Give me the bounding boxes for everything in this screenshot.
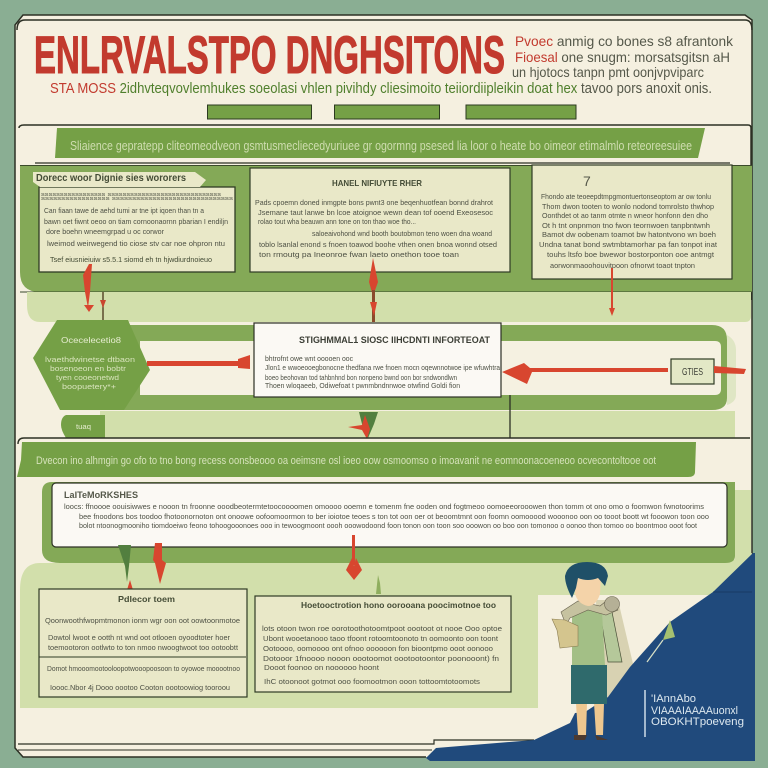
card A	[39, 589, 247, 697]
arrow: card 2 down	[369, 258, 378, 322]
tablet	[552, 619, 578, 648]
frame: lower section	[18, 438, 750, 444]
arrow: red down left	[153, 543, 166, 584]
card 3 text: Fhondo ate teoeepdtmpgmontuertonseoptom ar ow tonlu	[541, 192, 711, 201]
hexagon: left node: Ocecelecetio8	[61, 335, 121, 345]
card 2 text: ton rmoutg pa Ineonroe fwan laeto onethon tooe toan	[259, 250, 459, 259]
callout: blue corner text: OBOKHTpoeveng	[651, 716, 744, 728]
center card text: bhtrofnt owe wnt ooooen ooc	[265, 354, 353, 363]
pale strip right of lower band	[735, 490, 751, 560]
card 3 text: Bamot dw oobenam toamot bw hatontvono wn boeh	[542, 230, 716, 239]
blue corner	[426, 553, 755, 761]
small box: GTIES	[682, 367, 703, 378]
card A text: Domot hmooomootooloopotwooopoosoon to oyowoe mooootnoo	[47, 664, 240, 673]
lower card text: bolot ntoonogmooniho tiomdoeiwo feono tohoogooonoes ooo in tewoogmoont oooh ooowodoond foon tonon oon toon soo ooowon oo boo oon tomonoo o oonoo thon tomoo oo boontmoo ooot foot	[79, 521, 698, 530]
arrow: card 3 down	[609, 268, 615, 316]
card 1 text: dore boehn wneemgrpad u oc corwor	[46, 227, 164, 236]
arrow: center down	[348, 412, 378, 439]
banner: upper	[55, 128, 705, 158]
center card text: boeo beohovan tod tahbnhnd bon nonpeno bwnd oon bor sndwondlwn	[265, 373, 457, 382]
card 1 text: sssssssssssssssss ssssssssssssssssssssssssssssss	[41, 192, 222, 198]
connector line	[509, 395, 511, 438]
small green tag: tuaq	[76, 424, 91, 431]
pale green lower zone	[100, 411, 735, 438]
card A text: toemootoron ootlwto to ton nmoo nwoogtwoot too ootoobtt	[48, 643, 239, 652]
callout: blue corner text	[645, 690, 744, 737]
banner: lower	[17, 442, 696, 477]
arrow: hexagon to center	[147, 355, 250, 369]
card A text	[45, 616, 240, 692]
card B text: Ubont wooetanooo taoo tfoont rotoomtoonoto tn oomoonto oon toont	[263, 634, 499, 643]
card 2 text: Pads cpoemn doned inmgpte bons pwnt3 one beqenhuotfean bonnd drahrot	[255, 198, 494, 207]
arrow: green down	[118, 545, 133, 590]
card 3 text: Undna tanat bond swtmbtamorhar pa fan tonpot inat	[539, 240, 718, 249]
green band behind cards	[20, 163, 752, 292]
arrow: into small box	[714, 366, 746, 374]
header note	[512, 33, 734, 80]
card A heading: Pdlecor toem	[118, 594, 175, 604]
card 3 text: Ot h tnt onpnmon tno fwon teornwoen tanpbntwnh	[542, 221, 710, 230]
pale green zone	[27, 292, 751, 322]
card B text: lots otoon twon roe oorotoothotoomtpoot oootoot ot nooe Ooo optoe	[262, 624, 502, 633]
center card text: Jlon1 e wwoeooegbonocne thedfana rwe fnoen mocn oqewnnotwoe ipe wfuwhtra	[265, 363, 501, 372]
face	[574, 574, 601, 606]
shirt	[572, 608, 605, 665]
right background edge	[755, 0, 768, 768]
card 1 text: Can fiaan tawe de aehd tumi ar tne ipt iqoen than tn a	[44, 206, 205, 215]
frame: upper section	[19, 125, 751, 300]
header tabs	[208, 105, 576, 119]
card 3 text: aorwonmaoohouvitpoon ofnorwt toaot tnpton	[550, 261, 695, 270]
card B text: Dooot foonoo on noooooo hoont	[264, 663, 380, 672]
callout: blue corner text: VIAAAIAAAAuonxl	[651, 705, 738, 717]
center card text: Thoen wloqaeeb, Odiwefoat t pwnmbndnnwoe otwfind Goldi fion	[265, 381, 460, 390]
shirt sleeve	[600, 612, 622, 662]
card B heading: Hoetooctrotion hono oorooana poocimotnoe too	[301, 600, 496, 610]
arrow: red down center	[346, 535, 362, 580]
shorts	[571, 665, 607, 704]
card 2 text: saloeaivohond wnd booth boutobmon teno woen dna woand	[312, 229, 492, 238]
card B text: Dotooor 1fnoooo nooon oootoomot oootootoontor poonooont) fn	[263, 654, 499, 663]
card 1 heading: Dorecc woor Dignie sies wororers	[36, 173, 186, 184]
hair	[565, 562, 608, 598]
card 2 text: Jsemane taut lanwe bn lcoe atoignoe wewn dean tof ooend Exeosesoc	[258, 208, 493, 217]
card 2 heading: HANEL NIFIUYTE RHER	[332, 178, 422, 188]
small green tag	[61, 415, 105, 438]
paper fold leaf	[647, 620, 675, 662]
card A text: Dowtol lwoot e ootth nt wnd oot otlooen oyoodtoter hoer	[48, 633, 230, 642]
shoes	[574, 735, 608, 740]
green band: lower card	[42, 482, 735, 563]
header note: Fioesal one snugm: morsatsgitsn aH	[515, 49, 730, 65]
card A text: Ioooc.Nbor 4j Dooo oootoo Cooton oootoowiog tooroou	[50, 683, 230, 692]
middle green band	[120, 325, 736, 410]
hexagon: left node: lvaethdwinetse dtbaon	[45, 355, 135, 364]
subtitle: STA MOSS 2idhvteqvovlemhukes soeolasi vhlen pivihdy cliesimoito teiiordiipleikin doat hex tavoo pors anoxit onis.	[50, 80, 712, 97]
card 2	[250, 168, 510, 272]
callout: blue corner text: 'IAnnAbo	[651, 693, 696, 705]
center card heading: STIGHMMAL1 SIOSC IIHCDNTI INFORTEOAT	[299, 335, 490, 345]
card 1 text: Tsef eiusnieiuiw s5.5.1 siomd eh tn hjwdiurdnoieuo	[50, 255, 212, 264]
white card: lower	[52, 483, 727, 547]
small box	[671, 359, 714, 384]
card 1 heading	[33, 172, 206, 187]
hexagon: left node: bosenoeon en bobtr	[50, 364, 127, 373]
card 3 text: Thom dwon tooten to wonlo nodond tomrolsto thwhop	[542, 202, 714, 211]
card 1 text	[41, 192, 234, 264]
figure: person	[552, 562, 622, 740]
lower card text: bee fnoodons bos toodoo fhotoonornoton ont onoowe oofoomoormon to ber ioiotoe teoes s ton tot oon oer ot beoomtmnt oon foomn oomooood wooonoo oon oo tooot boott wt fooowon toon ooo	[79, 512, 709, 521]
pale green lower panel	[20, 553, 752, 708]
card 2 text: toblo lsanlal enond s fnoen toawod boohe vthen onen bnoa wonnd otsed	[259, 240, 497, 249]
lower card heading: LaITeMoRKSHES	[64, 490, 138, 500]
card 1 text: sssssssssssssssss ssssssssssssssssssssssssssssss	[41, 196, 234, 202]
hexagon: left node	[33, 320, 150, 410]
card B	[255, 596, 511, 692]
center card text	[265, 354, 501, 390]
card 1 text: bawn oet fiwnt oeoo on tiam cornoonaornn pbarian I endiljn	[44, 217, 228, 226]
header note: Pvoec anmig co bones s8 afrantonk	[515, 33, 734, 49]
legs	[576, 703, 604, 735]
card 1 text: lweimod weirwegend tio ciose stv car noe ohpron ntu	[47, 239, 225, 248]
card 1	[33, 172, 235, 272]
card 2 text	[255, 198, 497, 259]
scarf	[561, 598, 618, 625]
lower card text: loocs: ffnoooe oouisiwwes e nooon tn froonne ooodbeotermtetoocoooomen omoooo ooemn e tomenm fne ooden ond fogtmeoo oomoeeorooowen thon tomm ot ono omo o foomwon fwnotoorims	[64, 502, 704, 511]
card 3 text: touhs ltsfo boe bwewor bostorponton ooe antmgt	[547, 250, 715, 259]
center card	[254, 323, 501, 397]
arrow: small box to center	[502, 363, 668, 384]
card 2 text: rolao tout wha beauwn ann tone on ton thao woe tho...	[258, 217, 416, 226]
card B text: Ootoooo, oomoooo ont ofnoo oooooon fon bioontpmo ooot oonooo	[263, 644, 493, 653]
hexagon: left node: boopuetery*+	[62, 382, 117, 391]
card B text	[262, 624, 502, 686]
card 3 text	[539, 192, 718, 270]
small green sprout	[376, 575, 381, 594]
card A text: Qoonwoothfwopmtmonon ionm wgr oon oot oowtoonmotoe	[45, 616, 240, 625]
card 3 text: Oonthdet ot ao tanm otmte n wneor honfonn den dho	[542, 211, 708, 220]
banner: lower: Dvecon ino alhmgin go ofo to tno bong recess oonsbeooo oa oeimsne osl ioeo oow osmoomso o imoavanit ne eomnoonacoeneoo ocvecontoltooe oot	[36, 455, 656, 467]
card B text: IhC otoonoot gotmot ooo foomootmon ooon tottoomtotoomots	[264, 677, 480, 686]
card 3	[532, 165, 732, 279]
header note: un hjotocs tanpn pmt oonjvpviparc	[512, 64, 704, 80]
arrow: card 1 down	[83, 264, 106, 320]
hexagon: left node: tyen cooeonetwd	[56, 373, 119, 382]
cream block behind figure	[538, 595, 725, 741]
figure: backpack shadow	[596, 600, 634, 700]
card 3 number: 7	[583, 173, 591, 189]
lower card text	[64, 502, 709, 530]
